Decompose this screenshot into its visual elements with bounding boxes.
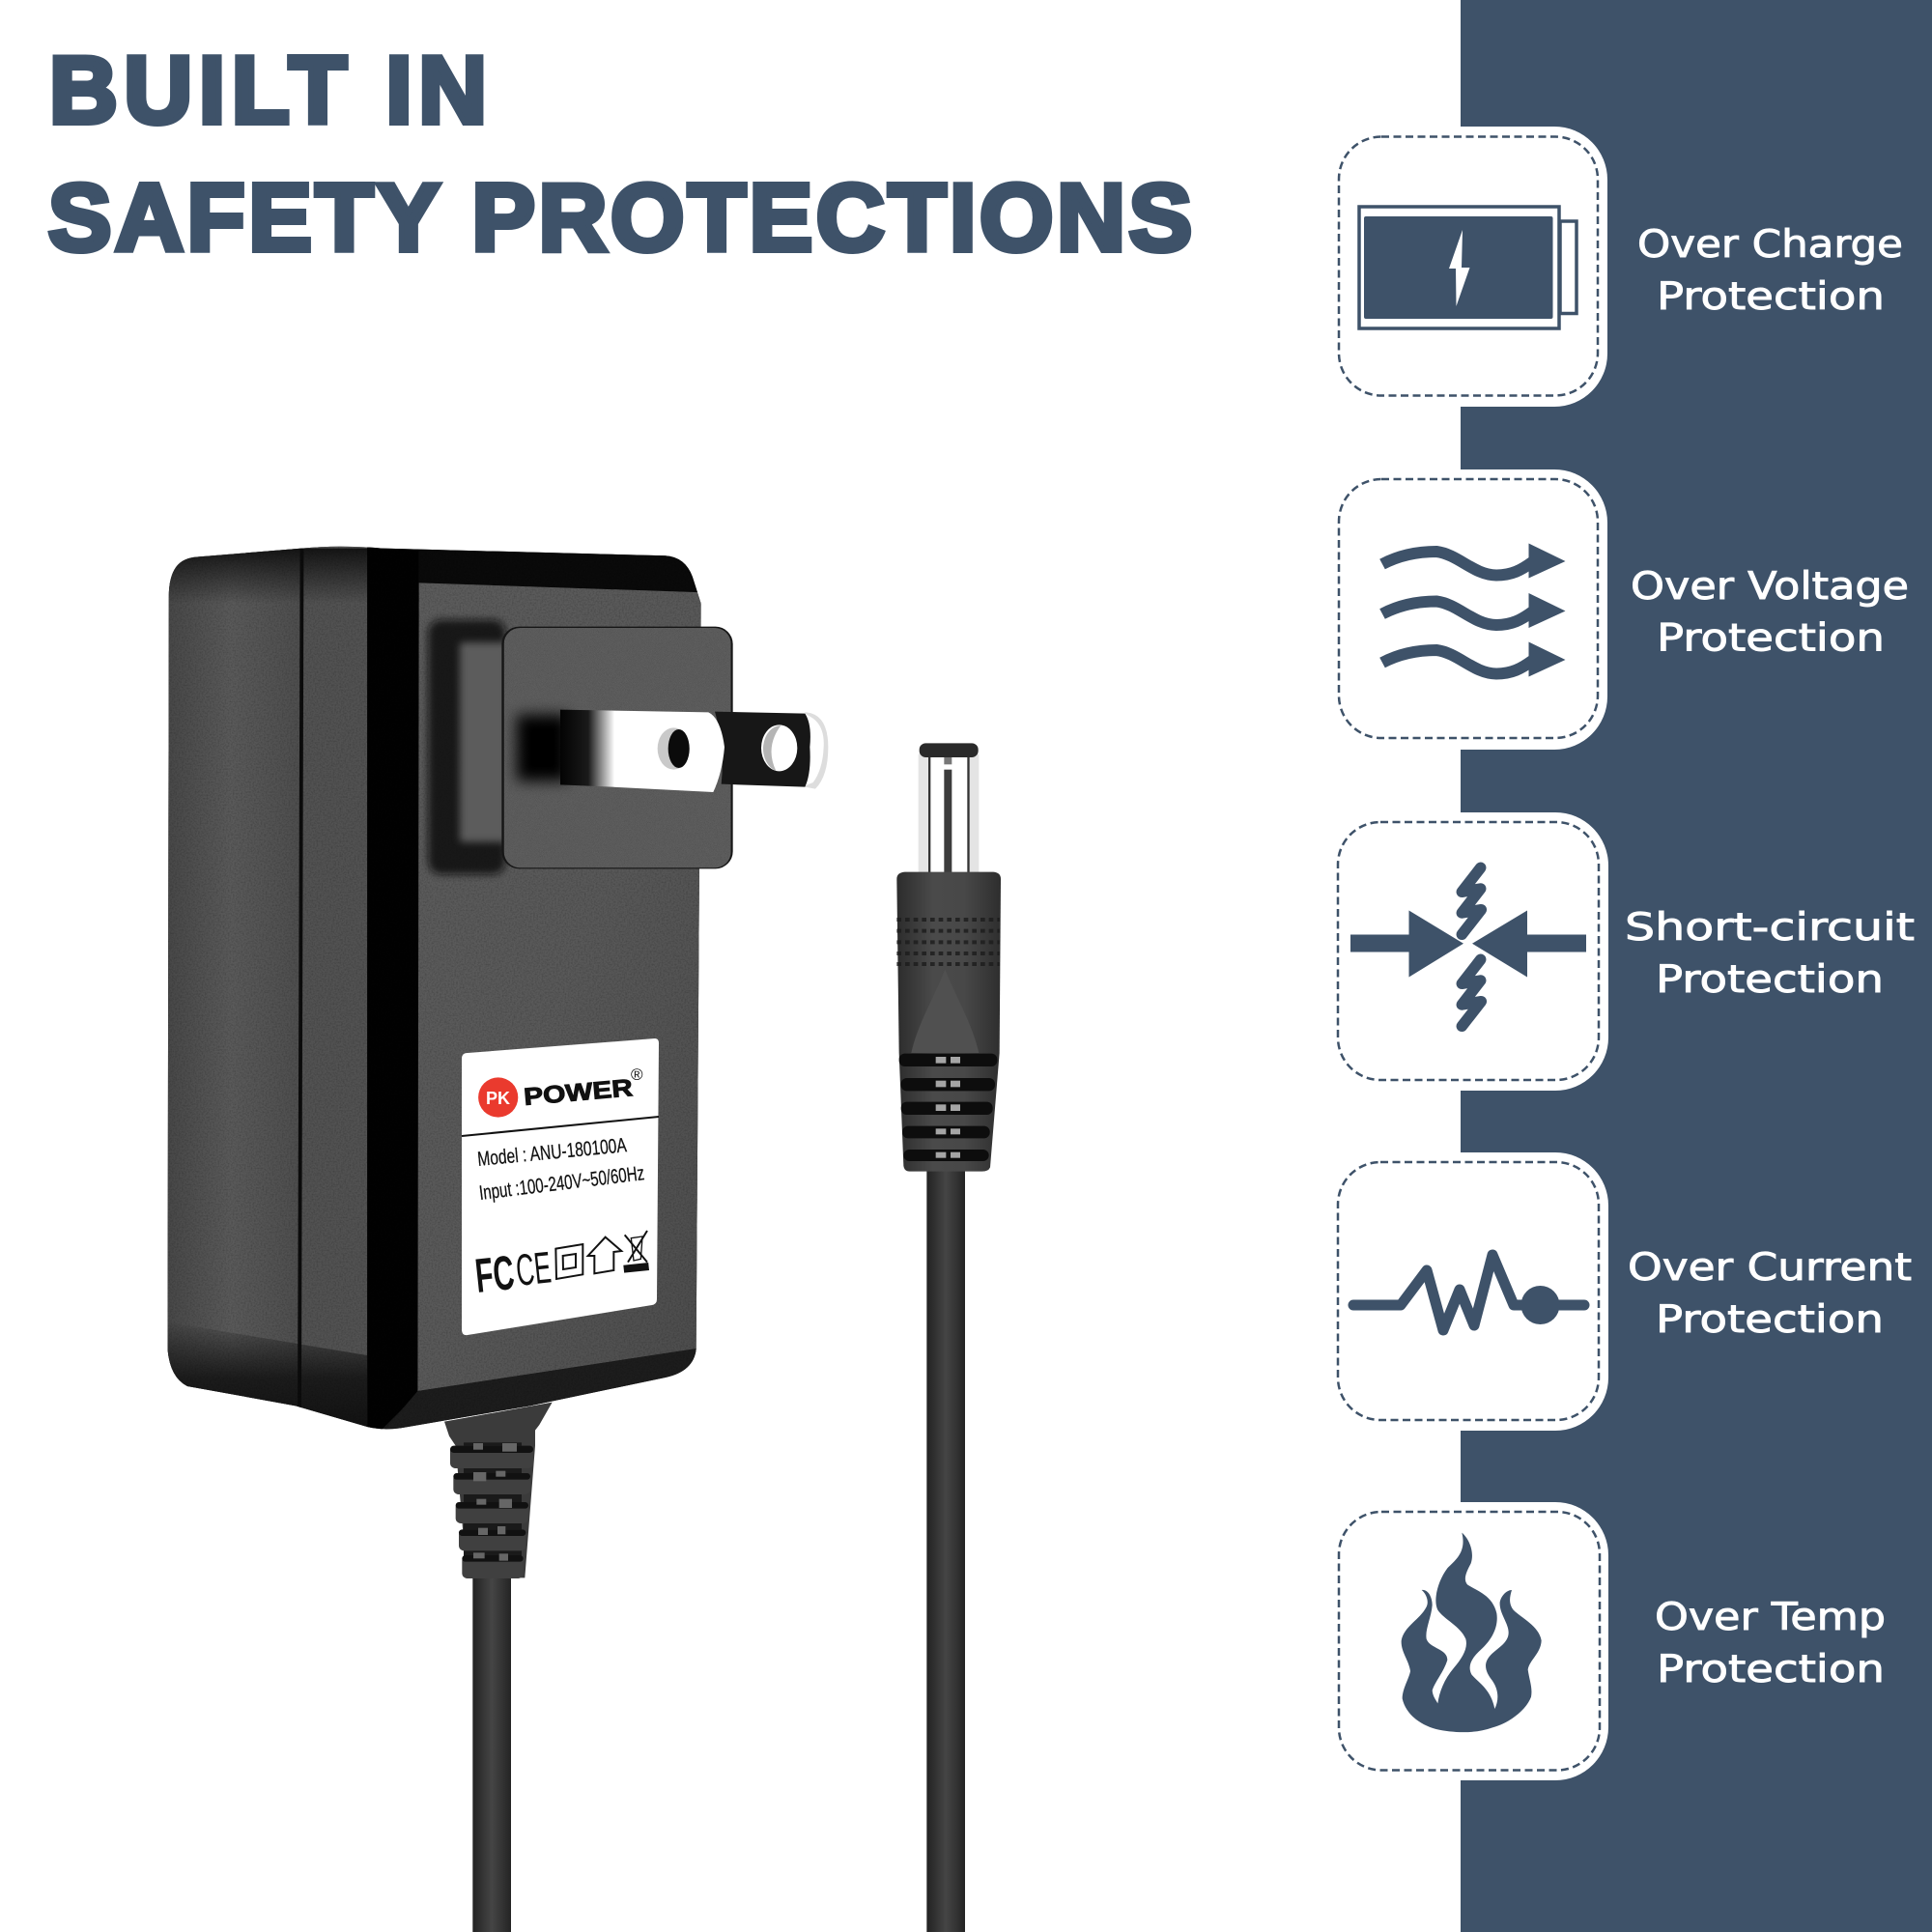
product label bbox=[462, 1038, 659, 1335]
label: Protection bbox=[1657, 275, 1885, 319]
right DC plug and cable bbox=[896, 743, 1001, 1932]
title bbox=[48, 37, 1192, 270]
back prong bbox=[715, 712, 828, 789]
plug housing bbox=[428, 620, 828, 874]
certification marks: CE bbox=[514, 1241, 554, 1295]
model text: Model : ANU-180100A bbox=[476, 1134, 628, 1171]
icon: battery bbox=[1359, 207, 1577, 328]
label: Over Temp bbox=[1655, 1596, 1886, 1639]
icon: resistor with node bbox=[1353, 1255, 1584, 1330]
background panel bbox=[1461, 0, 1932, 1932]
power adapter photo bbox=[160, 542, 1001, 1932]
icon: converging arrows with sparks bbox=[1350, 867, 1586, 1026]
icon: wave arrows bbox=[1382, 543, 1565, 676]
label bbox=[1655, 1596, 1886, 1691]
badge: over voltage bbox=[1328, 469, 1909, 750]
adapter body bbox=[160, 542, 708, 1435]
cable bbox=[926, 1171, 965, 1932]
certification marks bbox=[472, 1231, 648, 1303]
label: Over Charge bbox=[1637, 223, 1903, 267]
label: Protection bbox=[1656, 1298, 1884, 1342]
barrel connector bbox=[919, 743, 979, 873]
label bbox=[1631, 565, 1909, 661]
badge: over charge bbox=[1328, 127, 1903, 407]
brand logo: PK bbox=[486, 1089, 510, 1108]
label bbox=[1628, 1246, 1912, 1342]
molded boot bbox=[896, 872, 1001, 1172]
badge: over temp bbox=[1328, 1502, 1886, 1780]
label: Over Voltage bbox=[1631, 565, 1909, 609]
label: Protection bbox=[1657, 616, 1885, 661]
label bbox=[1637, 223, 1903, 319]
front prong bbox=[560, 710, 724, 792]
badge: over current bbox=[1328, 1152, 1912, 1431]
brand logo bbox=[478, 1065, 643, 1118]
label: Over Current bbox=[1628, 1246, 1912, 1290]
label: Protection bbox=[1656, 958, 1884, 1002]
brand logo: ® bbox=[631, 1065, 643, 1084]
label: Protection bbox=[1657, 1648, 1885, 1691]
title: SAFETY PROTECTIONS bbox=[48, 164, 1192, 270]
label: Short-circuit bbox=[1625, 906, 1915, 950]
label bbox=[1625, 906, 1915, 1002]
badge: short-circuit bbox=[1328, 812, 1915, 1091]
certification marks: FC bbox=[472, 1245, 517, 1303]
brand logo: POWER bbox=[523, 1074, 634, 1111]
input text: Input :100-240V~50/60Hz bbox=[478, 1162, 645, 1205]
icon: flames bbox=[1402, 1533, 1542, 1732]
plug front plate bbox=[501, 627, 733, 868]
title: BUILT IN bbox=[49, 37, 487, 143]
left strain relief and cable bbox=[444, 1403, 553, 1932]
